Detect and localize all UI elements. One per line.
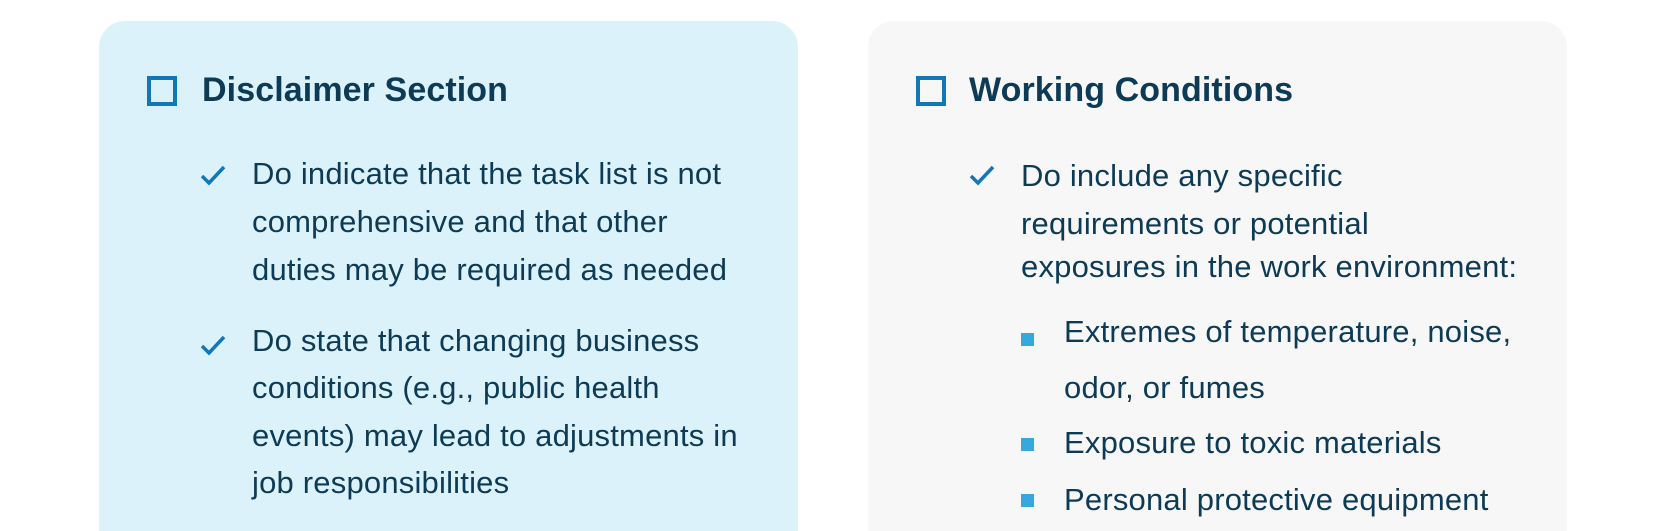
text block: item 2 <box>251 323 738 500</box>
bullet 3 <box>1021 494 1034 507</box>
heading: Working Conditions: Working Conditions <box>969 71 1293 109</box>
icon: check 1 <box>200 166 226 186</box>
text block: item 2: conditions (e.g., public health <box>252 370 660 405</box>
text block: item 1: comprehensive and that other <box>252 204 668 239</box>
list: sub bullets: odor, or fumes <box>1064 370 1265 405</box>
panel: disclaimer section <box>99 21 798 531</box>
icon: check 2 <box>200 336 226 356</box>
bullet 2 <box>1021 438 1034 451</box>
icon: heading checkbox <box>916 76 946 106</box>
text block: item 2: Do state that changing business <box>252 323 699 358</box>
panel: working conditions <box>868 21 1567 531</box>
text block: item 1: duties may be required as needed <box>252 252 727 287</box>
text block: item 1: Do indicate that the task list is not <box>252 156 721 191</box>
text block: main item: exposures in the work environment: <box>1021 249 1517 284</box>
icon: heading checkbox <box>147 76 177 106</box>
list: sub bullets: Personal protective equipment <box>1064 482 1489 517</box>
text block: main item: Do include any specific <box>1021 158 1343 193</box>
text block: item 2: job responsibilities <box>252 465 509 500</box>
text block: item 1 <box>252 156 727 287</box>
list: sub bullets <box>1021 314 1511 517</box>
text block: main item: requirements or potential <box>1021 206 1369 241</box>
list: sub bullets: Extremes of temperature, noise, <box>1064 314 1511 349</box>
icon: check <box>970 166 994 186</box>
text block: main item <box>1021 158 1517 284</box>
list: sub bullets: Exposure to toxic materials <box>1064 425 1442 460</box>
bullet 1 <box>1021 333 1034 346</box>
text block: item 2: events) may lead to adjustments in <box>252 418 738 453</box>
heading: Disclaimer Section: Disclaimer Section <box>202 71 508 109</box>
